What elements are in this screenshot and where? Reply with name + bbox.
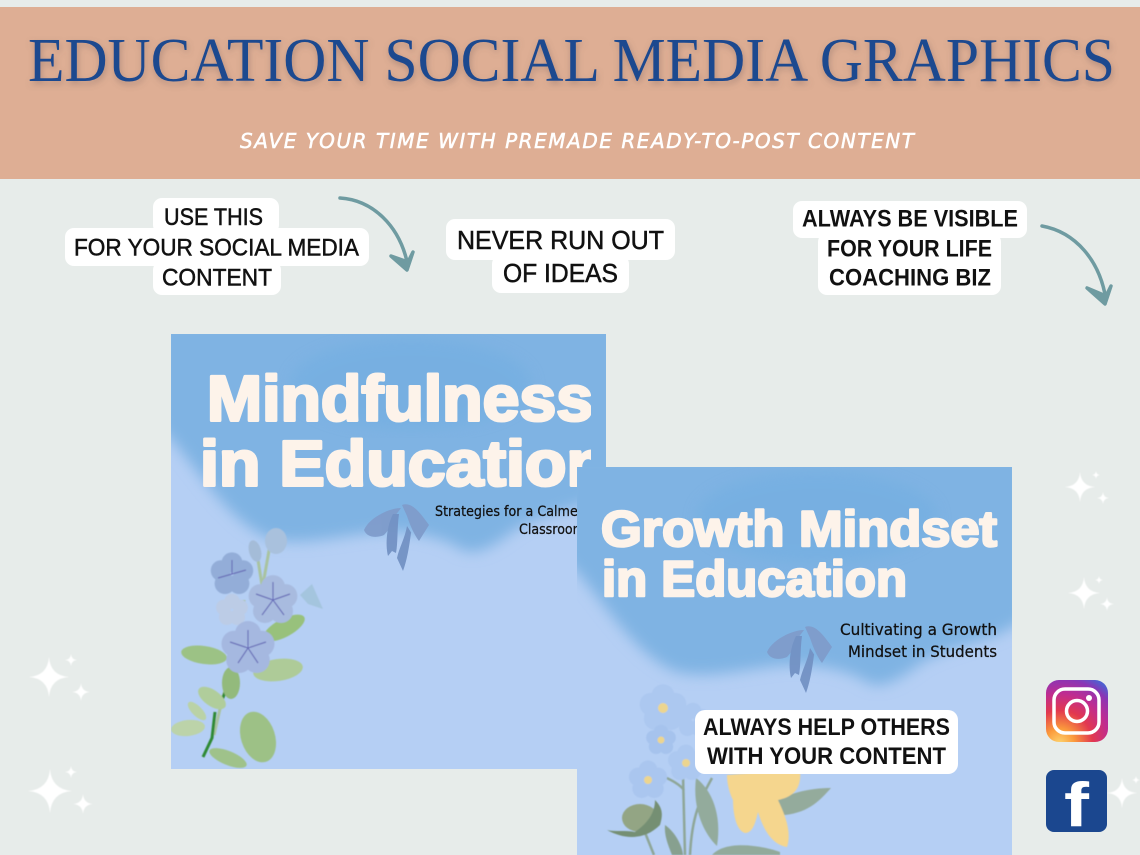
icon: facebook <box>1046 770 1107 840</box>
icon: bow <box>364 504 429 571</box>
card subtitle: Classroom <box>519 522 585 538</box>
heading: growth mindset: Growth Mindset <box>601 501 997 557</box>
icon: sparkles right lower <box>1068 576 1114 611</box>
heading: growth mindset: in Education <box>602 551 907 607</box>
heading: mindfulness <box>203 372 591 488</box>
callout: never run out of ideas: NEVER RUN OUT <box>457 225 664 255</box>
callout: use this for your social media content: CONTENT <box>162 264 272 292</box>
icon: sparkles left upper <box>29 654 90 701</box>
heading: mindfulness: in Education <box>200 428 608 500</box>
callout: never run out of ideas <box>446 219 675 293</box>
callout: use this for your social media content <box>65 198 369 295</box>
icon: bow <box>767 626 832 693</box>
card subtitle: Strategies for a Calmer <box>435 504 583 520</box>
card subtitle: Mindset in Students <box>848 642 997 661</box>
panel: mindfulness card <box>157 320 620 772</box>
panel: growth mindset card <box>563 453 1026 855</box>
heading: growth mindset <box>602 508 998 598</box>
callout: always help others: ALWAYS HELP OTHERS <box>703 714 950 741</box>
callout: always be visible: FOR YOUR LIFE <box>827 236 992 262</box>
callout: never run out of ideas: OF IDEAS <box>503 258 618 288</box>
icon: instagram <box>1046 680 1108 742</box>
icon: sparkles right upper <box>1065 471 1109 504</box>
card subtitle <box>840 622 996 658</box>
callout: always help others: WITH YOUR CONTENT <box>707 743 946 770</box>
callout: always be visible: ALWAYS BE VISIBLE <box>802 206 1018 232</box>
callout: use this for your social media content: USE THIS <box>164 204 263 231</box>
card subtitle <box>436 504 577 534</box>
illustration: floral bouquet <box>607 684 831 855</box>
callout: always help others <box>695 710 958 774</box>
callout: always be visible <box>793 201 1027 295</box>
heading: mindfulness: Mindfulness <box>207 362 593 434</box>
icon: sparkles left lower <box>28 766 93 814</box>
arrow: third callout <box>1042 226 1111 304</box>
icon: sparkle beside facebook <box>1107 776 1140 808</box>
title: EDUCATION SOCIAL MEDIA GRAPHICS <box>28 27 1115 95</box>
callout: use this for your social media content: FOR YOUR SOCIAL MEDIA <box>74 234 359 262</box>
icon: facebook: f <box>1064 771 1089 840</box>
subtitle: SAVE YOUR TIME WITH PREMADE READY-TO-POST CONTENT <box>240 129 916 153</box>
illustration: blue flower sprig <box>170 528 323 772</box>
card subtitle: Cultivating a Growth <box>840 620 997 639</box>
header banner <box>0 7 1140 179</box>
arrow: first callout <box>340 198 413 270</box>
callout: always be visible: COACHING BIZ <box>829 264 991 292</box>
